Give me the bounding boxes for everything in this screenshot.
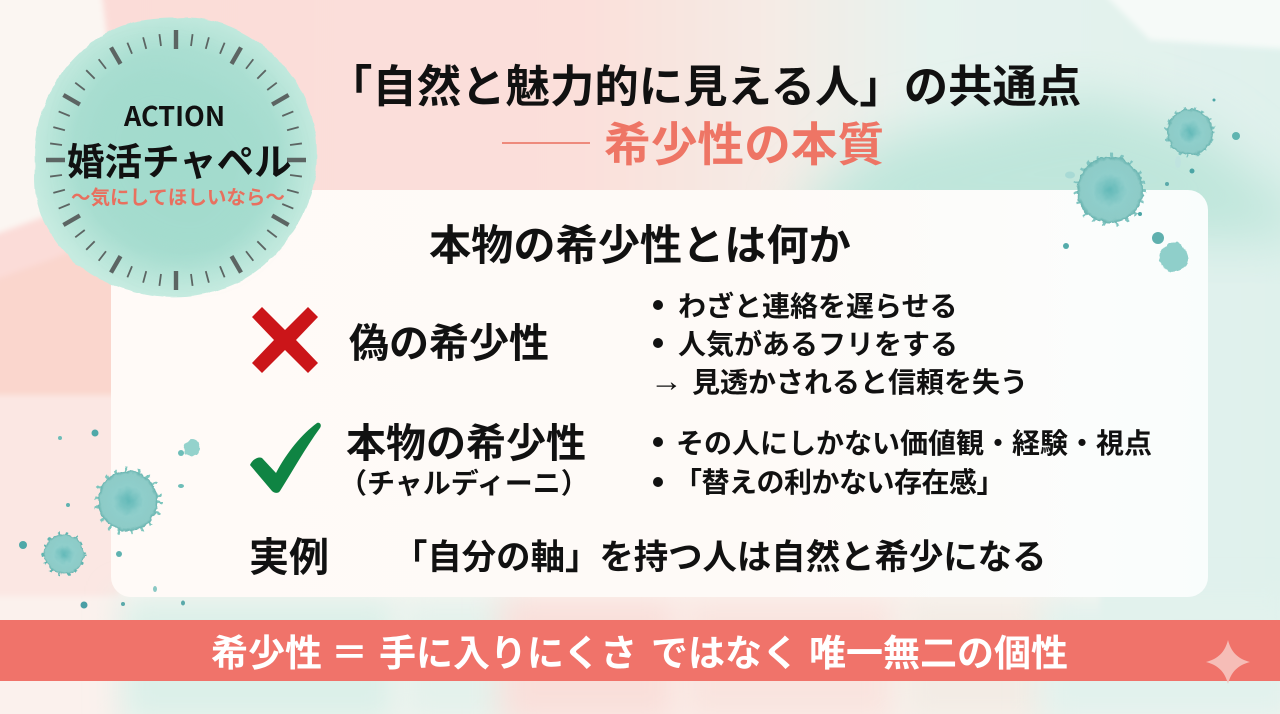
banner text bbox=[211, 623, 1068, 677]
label: 実例: 実例 bbox=[249, 525, 329, 583]
list: fake scarcity bbox=[650, 285, 1028, 401]
clock badge bbox=[34, 18, 318, 298]
badge label: ACTION: ACTION bbox=[124, 95, 225, 134]
list: genuine scarcity: その人にしかない価値観・経験・視点 bbox=[676, 422, 1152, 462]
banner text: 手に入りにくさ bbox=[379, 623, 637, 677]
banner text: ではなく bbox=[651, 623, 799, 677]
label: チャルディーニ: （チャルディーニ） bbox=[339, 462, 589, 502]
banner text: ＝ bbox=[331, 623, 368, 677]
bottom washes bbox=[0, 596, 130, 714]
panel heading: 本物の希少性とは何か bbox=[429, 212, 851, 273]
title: 「自然と魅力的に見える人」の共通点 bbox=[328, 50, 1081, 115]
main content panel bbox=[111, 190, 1208, 597]
list: fake scarcity: わざと連絡を遅らせる bbox=[678, 285, 957, 325]
badge label: 気にしてほしいなら: ～気にしてほしいなら～ bbox=[71, 181, 285, 210]
left washes bbox=[0, 230, 120, 420]
banner text: 唯一無二の個性 bbox=[809, 623, 1068, 677]
example text: 「自分の軸」を持つ人は自然と希少になる bbox=[393, 529, 1046, 579]
list: genuine scarcity bbox=[653, 422, 1152, 501]
badge label: 婚活チャペル: 婚活チャペル bbox=[67, 131, 292, 186]
list: fake scarcity: 人気があるフリをする bbox=[678, 323, 958, 363]
label: 本物の希少性: 本物の希少性 bbox=[346, 411, 586, 469]
label: 偽の希少性: 偽の希少性 bbox=[349, 311, 549, 369]
bottom banner bbox=[0, 620, 1280, 681]
clock face with tick marks bbox=[34, 18, 318, 298]
subtitle: 希少性の本質 bbox=[604, 108, 884, 175]
subtitle rule bbox=[502, 142, 590, 144]
list: fake scarcity: 見透かされると信頼を失う bbox=[692, 361, 1028, 401]
banner text: 希少性 bbox=[211, 623, 322, 677]
list: fake scarcity: → bbox=[650, 365, 683, 398]
list: genuine scarcity: 「替えの利かない存在感」 bbox=[674, 461, 1004, 501]
